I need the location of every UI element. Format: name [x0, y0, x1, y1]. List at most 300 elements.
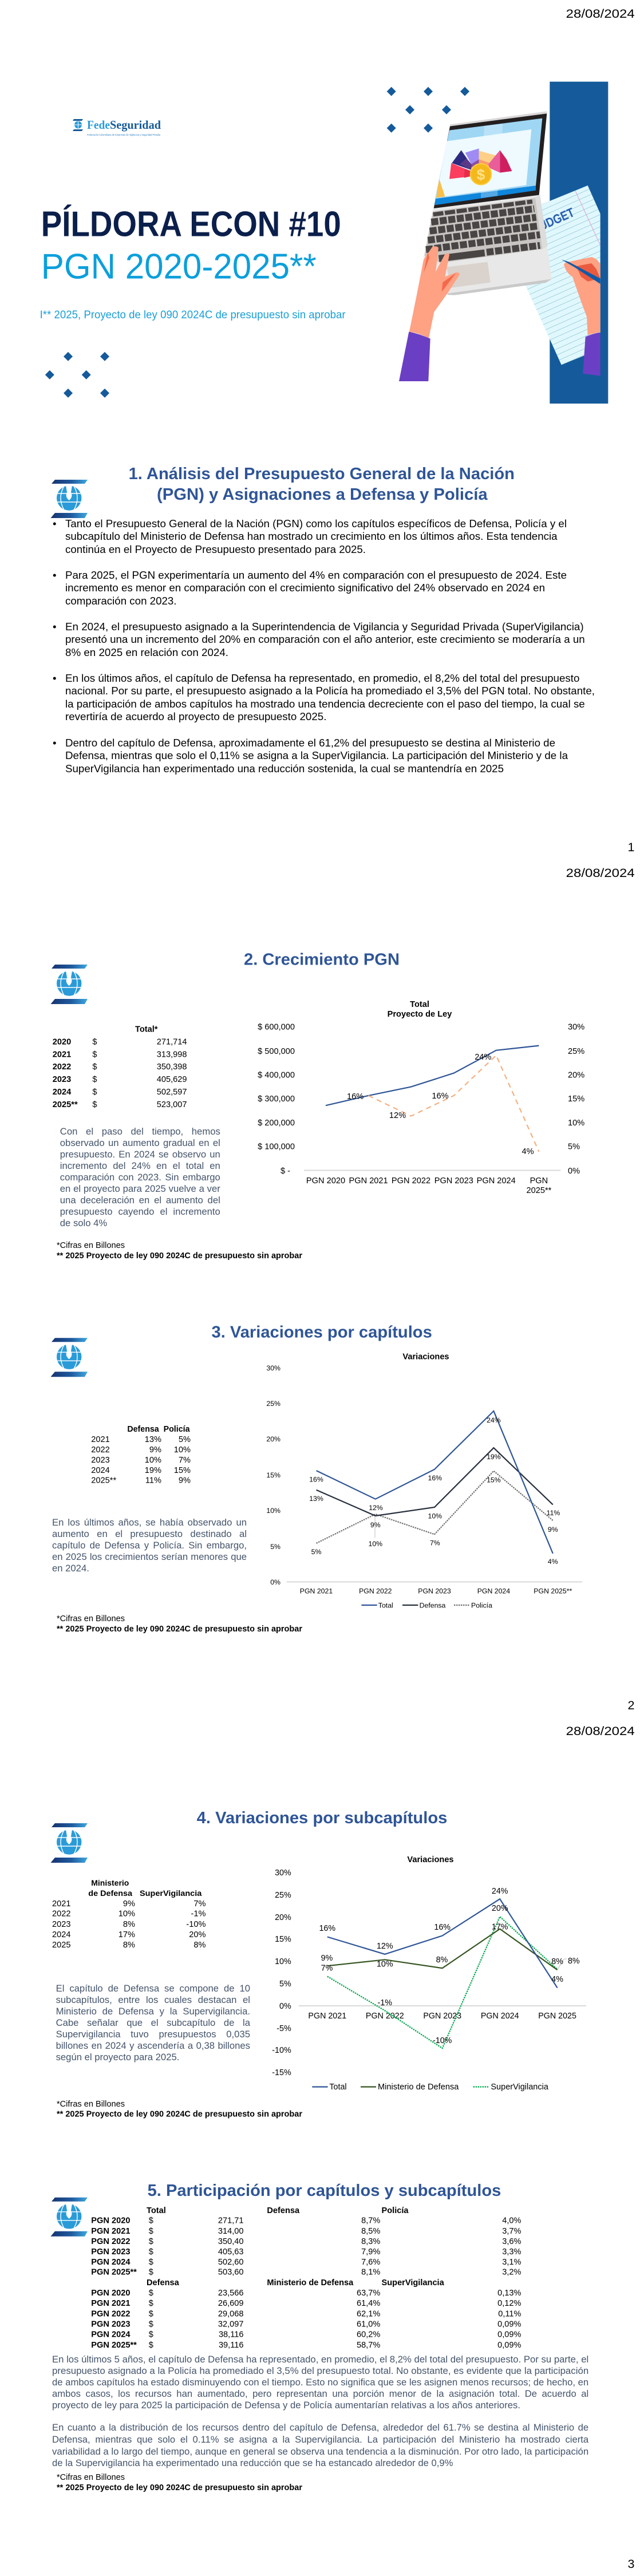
laptop base [424, 195, 552, 295]
data labels: 24% [475, 1053, 491, 1062]
table: participation by subchapter: 60,2% [357, 2330, 380, 2340]
table: participation by chapter: PGN 2022 [91, 2237, 130, 2246]
bullet list: analysis: continúa en el Proyecto de Presupuesto presentado para 2025. [65, 543, 366, 555]
text: subchapter commentary: Cabe señalar que el subcapítulo de la [56, 2017, 250, 2028]
table: Ministerio and SuperVigilancia growth: -1% [191, 1910, 206, 1919]
icon: diamonds bottom [45, 352, 109, 398]
table: participation by chapter: PGN 2024 [91, 2258, 131, 2267]
right axis: 20% [568, 1071, 584, 1080]
logo: FedeSeguridad: Fede [87, 118, 110, 132]
legend: Policía [471, 1601, 492, 1609]
table: total PGN: 2021 [53, 1050, 71, 1059]
footnotes section 4: ** 2025 Proyecto de ley 090 2024C de presupuesto sin aprobar [57, 2110, 302, 2119]
data labels: 15% [487, 1476, 501, 1484]
table: participation by subchapter: 62,1% [357, 2310, 380, 2319]
category labels: PGN 2020 [306, 1176, 345, 1186]
data labels [309, 1416, 560, 1566]
text: participation commentary 2: En cuanto a la distribución de los recursos dentro del capítulo de Defensa, alrededor del 61.7% se destina al Ministerio de [52, 2422, 588, 2433]
left axis [258, 1022, 295, 1176]
table: Ministerio and SuperVigilancia growth: 7% [193, 1899, 206, 1909]
left axis: $ 300,000 [258, 1095, 295, 1104]
line: Policía [316, 1471, 553, 1543]
legend [361, 1601, 492, 1609]
footnotes section 4: *Cifras en Billones [57, 2100, 125, 2109]
text: growth commentary: comparación con 2023. Sin embargo [60, 1172, 220, 1183]
y axis: 15% [266, 1471, 280, 1479]
table: total PGN: 350,398 [157, 1062, 187, 1072]
data labels: 7% [430, 1539, 440, 1547]
category labels: PGN 2021 [300, 1587, 333, 1595]
data labels: 24% [492, 1887, 508, 1896]
table: participation by subchapter: $ [149, 2289, 153, 2298]
data labels: 17% [492, 1923, 508, 1932]
table: participation by chapter: 405,63 [218, 2247, 244, 2257]
y axis: 0% [279, 2002, 291, 2011]
y axis: 15% [275, 1935, 291, 1944]
category labels [300, 1587, 572, 1595]
line: Total [327, 1899, 558, 1988]
y axis: 20% [275, 1913, 291, 1922]
table: participation by chapter: 7,9% [361, 2247, 380, 2257]
data labels: 20% [492, 1904, 508, 1913]
table: participation by chapter: 271,71 [218, 2217, 244, 2226]
left axis: $ 600,000 [258, 1022, 295, 1032]
table: Ministerio and SuperVigilancia growth: Ministerio [91, 1878, 129, 1887]
text: participation commentary 1: En los últimos 5 años, el capítulo de Defensa ha representado, en promedio, el 8,2% del total del presupuesto. Por su parte, el [52, 2354, 588, 2365]
table: Defensa and Policía growth: 7% [179, 1456, 191, 1465]
text: participation commentary 2: variabilidad a lo largo del tiempo, aunque en general se observa una tendencia a la disminución. Por otro lado, la participación [52, 2446, 588, 2457]
table: participation by subchapter: $ [149, 2310, 153, 2319]
bullet list: analysis: En 2024, el presupuesto asignado a la Superintendencia de Vigilancia y Seguridad Privada (SuperVigilancia) [65, 621, 584, 633]
heading 5: 5. Participación por capítulos y subcapítulos [148, 2182, 501, 2200]
heading 1: 1. Análisis del Presupuesto General de la Nación [129, 465, 515, 483]
table: participation by chapter: 503,60 [218, 2268, 244, 2277]
table: total PGN: 2025** [53, 1100, 78, 1109]
logo: FedeSeguridad [73, 118, 161, 136]
text: growth commentary: presupuesto. En 2024 se observo un [60, 1149, 220, 1160]
table: participation by chapter: $ [149, 2227, 153, 2236]
table: participation by subchapter: PGN 2021 [91, 2299, 130, 2308]
category labels: PGN [530, 1176, 548, 1186]
y axis: -5% [276, 2024, 291, 2033]
heading 2: 2. Crecimiento PGN [244, 950, 400, 969]
laptop screen [434, 111, 547, 208]
category labels: PGN 2025** [534, 1587, 572, 1595]
chart: total PGN and growth [258, 1000, 584, 1195]
table: participation by chapter: 3,1% [502, 2258, 521, 2267]
left axis: $ 100,000 [258, 1143, 295, 1152]
category labels: PGN 2023 [418, 1587, 451, 1595]
budget sheet [526, 185, 600, 365]
table: participation by subchapter: PGN 2025** [91, 2341, 137, 2350]
table: participation by chapter: Defensa [267, 2206, 300, 2215]
table: participation by subchapter: 0,12% [497, 2299, 521, 2308]
text: chapter commentary: En los últimos años, se había observado un [52, 1517, 247, 1528]
category labels: PGN 2024 [477, 1176, 516, 1186]
table: Defensa and Policía growth: 11% [145, 1476, 161, 1485]
table: Defensa and Policía growth: 2025** [91, 1476, 116, 1485]
heading 1: (PGN) y Asignaciones a Defensa y Policía [157, 485, 488, 504]
bullet list: analysis: • [53, 621, 57, 633]
y axis: 30% [275, 1868, 291, 1878]
table: Ministerio and SuperVigilancia growth: 10% [118, 1910, 135, 1919]
table: total PGN: 405,629 [157, 1075, 187, 1084]
page number 1: 1 [628, 840, 634, 854]
text: growth commentary [60, 1126, 220, 1229]
bullet list: analysis: Tanto el Presupuesto General de la Nación (PGN) como los capítulos específicos de Defensa, Policía y el [65, 517, 567, 530]
table: participation by chapter: PGN 2021 [91, 2227, 130, 2236]
text: chapter commentary [52, 1517, 247, 1574]
right axis: 0% [568, 1167, 580, 1176]
table: Ministerio and SuperVigilancia growth: SuperVigilancia [140, 1888, 202, 1898]
y axis [272, 1868, 291, 2077]
right axis: 5% [568, 1143, 580, 1152]
table: total PGN: 271,714 [157, 1037, 187, 1046]
table: participation by chapter: 4,0% [502, 2217, 521, 2226]
table: total PGN: 2023 [53, 1075, 71, 1084]
chart title: Proyecto de Ley [388, 1010, 452, 1019]
table: participation by chapter: PGN 2020 [91, 2217, 130, 2226]
y axis: 25% [266, 1400, 280, 1408]
y axis: 10% [275, 1957, 291, 1966]
table: participation by chapter: PGN 2025** [91, 2268, 137, 2277]
table: Defensa and Policía growth: 5% [179, 1435, 191, 1444]
bullet list: analysis: revertiría de acuerdo al proyecto de presupuesto 2025. [65, 710, 326, 722]
data labels: 16% [432, 1092, 449, 1101]
left axis: $ 200,000 [258, 1119, 295, 1128]
data labels: 4% [548, 1558, 558, 1566]
table: participation by subchapter: PGN 2020 [91, 2289, 130, 2298]
table: participation by subchapter: 58,7% [357, 2341, 380, 2350]
table: total PGN: $ [92, 1062, 97, 1072]
table: participation by subchapter: SuperVigilancia [381, 2278, 445, 2287]
table: participation by chapter: $ [149, 2268, 153, 2277]
data labels: 16% [347, 1092, 364, 1101]
data labels: 16% [309, 1475, 323, 1483]
category labels: PGN 2021 [308, 2012, 346, 2021]
table: Defensa and Policía growth: Policía [164, 1425, 190, 1434]
legend [312, 2083, 548, 2092]
right axis: 25% [568, 1047, 584, 1056]
table: Ministerio and SuperVigilancia growth: 8% [193, 1941, 206, 1950]
text: growth commentary: una deceleración en el aumento del [60, 1195, 220, 1206]
data labels: 12% [369, 1504, 383, 1512]
bullet list: analysis: 8% en 2025 en relación con 2024. [65, 646, 228, 658]
table: participation by chapter: $ [149, 2217, 153, 2226]
line: Ministerio de Defensa [327, 1929, 558, 1970]
table: total PGN: $ [92, 1088, 97, 1097]
table: participation by chapter: Total [147, 2206, 166, 2215]
category labels: PGN 2022 [359, 1587, 392, 1595]
data labels: 5% [311, 1548, 321, 1556]
table: participation by chapter: 8,1% [361, 2268, 380, 2277]
text: subchapter commentary: subcapítulos, entre los cuales destacan el [56, 1994, 250, 2005]
data labels: 12% [389, 1111, 406, 1120]
data labels: 4% [521, 1147, 534, 1156]
data labels: 24% [487, 1416, 501, 1424]
blue panel [550, 82, 608, 404]
table: total PGN: $ [92, 1037, 97, 1046]
line: Total [316, 1411, 553, 1554]
category labels: PGN 2024 [481, 2012, 519, 2021]
heading 1 [129, 465, 515, 504]
text: participation commentary 1: presupuesto asignado a la Policía ha promediado el 3,5% del presupuesto total. No obstante, es evidente que la participación [52, 2365, 588, 2376]
data labels [319, 1887, 580, 2045]
table: Defensa and Policía growth: 2023 [91, 1456, 110, 1465]
table: Defensa and Policía growth: Defensa [127, 1425, 160, 1434]
left axis: $ 500,000 [258, 1047, 295, 1056]
chart title: Variaciones [402, 1352, 449, 1361]
table: participation by subchapter: 0,09% [497, 2320, 521, 2329]
table: participation by subchapter: 0,11% [498, 2310, 521, 2319]
data labels: 16% [428, 1474, 442, 1482]
y axis [266, 1364, 280, 1586]
table: participation by subchapter: $ [149, 2330, 153, 2340]
heading 4: 4. Variaciones por subcapítulos [197, 1809, 447, 1827]
text: subchapter commentary: billones en 2024 y ascendería a 0,38 billones [56, 2040, 250, 2051]
table: participation by chapter: $ [149, 2237, 153, 2246]
table: total PGN: 523,007 [157, 1100, 187, 1109]
budget sheet: BUDGET [530, 204, 576, 236]
category labels: PGN 2022 [392, 1176, 430, 1186]
heading 3: 3. Variaciones por capítulos [212, 1323, 432, 1341]
bullet list: analysis: nacional. Por su parte, el presupuesto asignado a la Policía ha promediado el 3,5% del PGN total. No obstante, [65, 685, 595, 697]
bullet list: analysis: Dentro del capítulo de Defensa, aproximadamente el 61,2% del presupuesto se destina al Ministerio de [65, 737, 555, 749]
data labels: 8% [568, 1957, 580, 1966]
table: participation by chapter: 3,3% [502, 2247, 521, 2257]
data labels: 16% [319, 1924, 335, 1933]
table: total PGN: $ [92, 1050, 97, 1059]
y axis: 10% [266, 1507, 280, 1515]
table: Defensa and Policía growth: 2024 [91, 1466, 110, 1475]
table: Ministerio and SuperVigilancia growth: de Defensa [88, 1888, 132, 1898]
table: participation by chapter: 3,7% [502, 2227, 521, 2236]
data labels: 13% [309, 1495, 323, 1503]
line: SuperVigilancia [327, 1917, 558, 2048]
bullet list: analysis: SuperVigilancia han experimentado una reducción sostenida, la cual se mantendría en 2025 [65, 762, 504, 775]
text: chapter commentary: capítulo de Defensa y Policía. Sin embargo, [52, 1540, 247, 1551]
table: participation by subchapter: 0,13% [497, 2289, 521, 2298]
text: subchapter commentary: Supervigilancia tuvo presupuestos 0,035 [56, 2029, 250, 2040]
date: slide 2: 28/08/2024 [566, 866, 635, 880]
data labels: 12% [377, 1942, 393, 1951]
logo: FedeSeguridad: Seguridad [110, 118, 161, 132]
data labels: 9% [548, 1526, 558, 1534]
text: participation commentary 1 [52, 2354, 588, 2411]
table: Defensa and Policía growth: 15% [174, 1466, 191, 1475]
footnotes section 3 [57, 1614, 302, 1634]
table: Ministerio and SuperVigilancia growth [52, 1878, 206, 1950]
category labels: PGN 2022 [366, 2012, 404, 2021]
date: slide 1: 28/08/2024 [566, 7, 635, 21]
table: participation by chapter [91, 2206, 521, 2277]
table: total PGN: $ [92, 1100, 97, 1109]
page number 2: 2 [628, 1698, 634, 1712]
table: total PGN: $ [92, 1075, 97, 1084]
table: total PGN [53, 1025, 187, 1109]
table: participation by subchapter: PGN 2022 [91, 2310, 130, 2319]
table: Defensa and Policía growth: 10% [174, 1445, 191, 1455]
bullet list: analysis: • [53, 569, 57, 581]
data labels: 16% [434, 1923, 451, 1932]
footnotes section 2: *Cifras en Billones [57, 1241, 125, 1250]
subtitle: PGN years: PGN 2020-2025** [41, 247, 317, 286]
table: participation by subchapter: 26,609 [218, 2299, 244, 2308]
table: Ministerio and SuperVigilancia growth: 20% [189, 1930, 206, 1939]
left hand [399, 246, 460, 381]
table: participation by subchapter: $ [149, 2341, 153, 2350]
y axis: -15% [272, 2068, 291, 2077]
data labels: 4% [551, 1975, 563, 1984]
right axis: 15% [568, 1095, 584, 1104]
table: participation by subchapter: Ministerio de Defensa [267, 2278, 354, 2287]
line: total [326, 1046, 539, 1105]
table: participation by subchapter: 29,068 [218, 2310, 244, 2319]
table: total PGN: 2022 [53, 1062, 71, 1072]
bullet list: analysis: incremento es menor en comparación con el crecimiento significativo del 24% observado en 2024 en [65, 582, 545, 594]
table: Defensa and Policía growth: 2021 [91, 1435, 110, 1444]
icon: diamonds top [387, 87, 469, 133]
table: Ministerio and SuperVigilancia growth: -10% [186, 1920, 206, 1929]
data labels: 8% [436, 1955, 448, 1965]
text: participation commentary 1: de ambos capítulos ha estado disminuyendo con el tiempo. Esto no significa que se les asignen menos recursos; de hecho, en [52, 2377, 588, 2388]
text: participation commentary 2: Defensa, mientras que solo el 0.11% se asigna a la Supervigilancia. La participación del Ministerio ha mostrado cierta [52, 2434, 588, 2445]
title: PÍLDORA ECON #10 [41, 204, 341, 244]
text: participation commentary 2 [52, 2422, 588, 2468]
text: participation commentary 1: ambos casos, los recursos han aumentado, pero representan una porción menor de la asignación total. De acuerdo al [52, 2388, 588, 2399]
table: Ministerio and SuperVigilancia growth: 2021 [52, 1899, 70, 1909]
category labels: PGN 2024 [477, 1587, 510, 1595]
chart title: Total [410, 1000, 429, 1009]
text: participation commentary 1: proyecto de ley para 2025 la participación de Defensa y de Policía aumentarían relativas a los años anteriores. [52, 2400, 520, 2411]
table: Ministerio and SuperVigilancia growth: 2024 [52, 1930, 70, 1939]
table: participation by subchapter: 39,116 [219, 2341, 244, 2350]
text: growth commentary: observado un aumento gradual en el [60, 1137, 220, 1148]
left axis: $ 400,000 [258, 1071, 295, 1080]
table: Ministerio and SuperVigilancia growth: 17% [118, 1930, 135, 1939]
page number 3: 3 [628, 2557, 635, 2571]
table: participation by subchapter [91, 2278, 521, 2350]
right axis [568, 1022, 584, 1176]
text: growth commentary: incremento del 24% en el total en [60, 1160, 220, 1171]
left axis: $ - [280, 1167, 290, 1176]
text: chapter commentary: en 2025 los crecimientos serían menores que [52, 1551, 247, 1562]
text: growth commentary: de solo 4% [60, 1218, 107, 1228]
footnotes section 2 [57, 1241, 302, 1261]
table: participation by subchapter: PGN 2023 [91, 2320, 130, 2329]
footnotes section 2: ** 2025 Proyecto de ley 090 2024C de presupuesto sin aprobar [57, 1251, 302, 1261]
category labels: PGN 2021 [349, 1176, 388, 1186]
data labels: -10% [433, 2036, 452, 2045]
logo: FedeSeguridad: Federación Colombiana de Empresas de Vigilancia y Seguridad Privada [87, 133, 160, 136]
bullet list: analysis: Para 2025, el PGN experimentaría un aumento del 4% en comparación con el presupuesto de 2024. Este [65, 569, 567, 581]
table: participation by subchapter: 63,7% [357, 2289, 380, 2298]
text: subchapter commentary: según el proyecto para 2025. [56, 2052, 179, 2063]
bullet list: analysis: la participación de ambos capítulos ha mostrado una tendencia decreciente con el paso del tiempo, la cual se [65, 698, 585, 710]
data labels [347, 1053, 534, 1156]
table: Defensa and Policía growth: 2022 [91, 1445, 110, 1455]
text: growth commentary: en el proyecto para 2025 vuelve a ver [60, 1183, 220, 1194]
bullet list: analysis [53, 517, 595, 775]
footnotes section 5 [57, 2473, 302, 2492]
legend: Ministerio de Defensa [378, 2083, 459, 2092]
chart title [388, 1000, 452, 1019]
icon: logo section 1 [50, 480, 88, 518]
table: participation by chapter: 3,2% [502, 2268, 521, 2277]
category labels: PGN 2025 [538, 2012, 576, 2021]
y axis: 5% [279, 1980, 291, 1989]
y axis: -10% [272, 2046, 291, 2055]
table: participation by subchapter: PGN 2024 [91, 2330, 131, 2340]
bullet list: analysis: subcapítulo del Ministerio de Defensa han mostrado un crecimiento en los últimos años. Esta tendencia [65, 530, 558, 542]
table: participation by subchapter: 38,116 [219, 2330, 244, 2340]
right axis: 10% [568, 1119, 584, 1128]
category labels [306, 1176, 552, 1195]
table: Ministerio and SuperVigilancia growth: 2022 [52, 1910, 70, 1919]
table: total PGN: 2024 [53, 1088, 72, 1097]
table: participation by subchapter: 0,09% [497, 2341, 521, 2350]
data labels: 10% [428, 1512, 442, 1520]
note: proyecto de ley: I** 2025, Proyecto de ley 090 2024C de presupuesto sin aprobar [40, 309, 346, 321]
footnotes section 5: ** 2025 Proyecto de ley 090 2024C de presupuesto sin aprobar [57, 2483, 302, 2492]
table: Defensa and Policía growth: 9% [179, 1476, 191, 1485]
table: participation by subchapter: 61,4% [357, 2299, 380, 2308]
footnotes section 5: *Cifras en Billones [57, 2473, 125, 2482]
text: participation commentary 2: de la Supervigilancia ha experimentado una reducción que se ha estancado alrededor de 0,9% [52, 2458, 453, 2468]
table: Ministerio and SuperVigilancia growth: 8% [123, 1941, 135, 1950]
bullet list: analysis: • [53, 737, 57, 749]
table: participation by chapter: PGN 2023 [91, 2247, 130, 2257]
date: slide 3: 28/08/2024 [566, 1724, 635, 1738]
legend: Defensa [420, 1601, 446, 1609]
category labels: 2025** [526, 1186, 552, 1195]
table: participation by subchapter: 61,0% [357, 2320, 380, 2329]
table: total PGN: 2020 [53, 1037, 71, 1046]
bullet list: analysis: Defensa, mientras que solo el 0,11% se asigna a la SuperVigilancia. La participación del Ministerio y de la [65, 749, 568, 761]
chart: variations by subchapter [272, 1855, 586, 2092]
chart title: Variaciones [407, 1855, 454, 1864]
table: participation by chapter: $ [149, 2258, 153, 2267]
category labels [308, 2012, 576, 2021]
data labels: 10% [368, 1540, 382, 1548]
text: growth commentary: Con el paso del tiempo, hemos [60, 1126, 220, 1137]
table: total PGN: 502,597 [157, 1088, 187, 1097]
data labels: 10% [377, 1960, 393, 1969]
table: participation by chapter: Policía [381, 2206, 409, 2215]
chart: variations by chapter [266, 1352, 582, 1609]
table: participation by chapter: $ [149, 2247, 153, 2257]
data labels: 9% [370, 1521, 381, 1529]
table: total PGN: Total* [135, 1025, 158, 1034]
table: Defensa and Policía growth [91, 1425, 191, 1485]
table: participation by subchapter: Defensa [147, 2278, 180, 2287]
table: Defensa and Policía growth: 10% [145, 1456, 161, 1465]
table: participation by chapter: 350,40 [218, 2237, 244, 2246]
y axis: 5% [270, 1543, 280, 1551]
text: chapter commentary: aumento en el presupuesto destinado al [52, 1528, 247, 1539]
y axis: 0% [270, 1578, 280, 1586]
data labels: 9% [321, 1954, 333, 1963]
data labels: 19% [487, 1453, 501, 1461]
table: participation by chapter: 8,5% [361, 2227, 380, 2236]
table: participation by subchapter: $ [149, 2320, 153, 2329]
data labels: -1% [378, 1998, 392, 2008]
icon: logo section 4 [50, 1823, 88, 1863]
line: growth rate [369, 1056, 539, 1152]
table: participation by subchapter: 23,566 [218, 2289, 244, 2298]
footnotes section 3: *Cifras en Billones [57, 1614, 125, 1623]
table: participation by chapter: 7,6% [361, 2258, 380, 2267]
